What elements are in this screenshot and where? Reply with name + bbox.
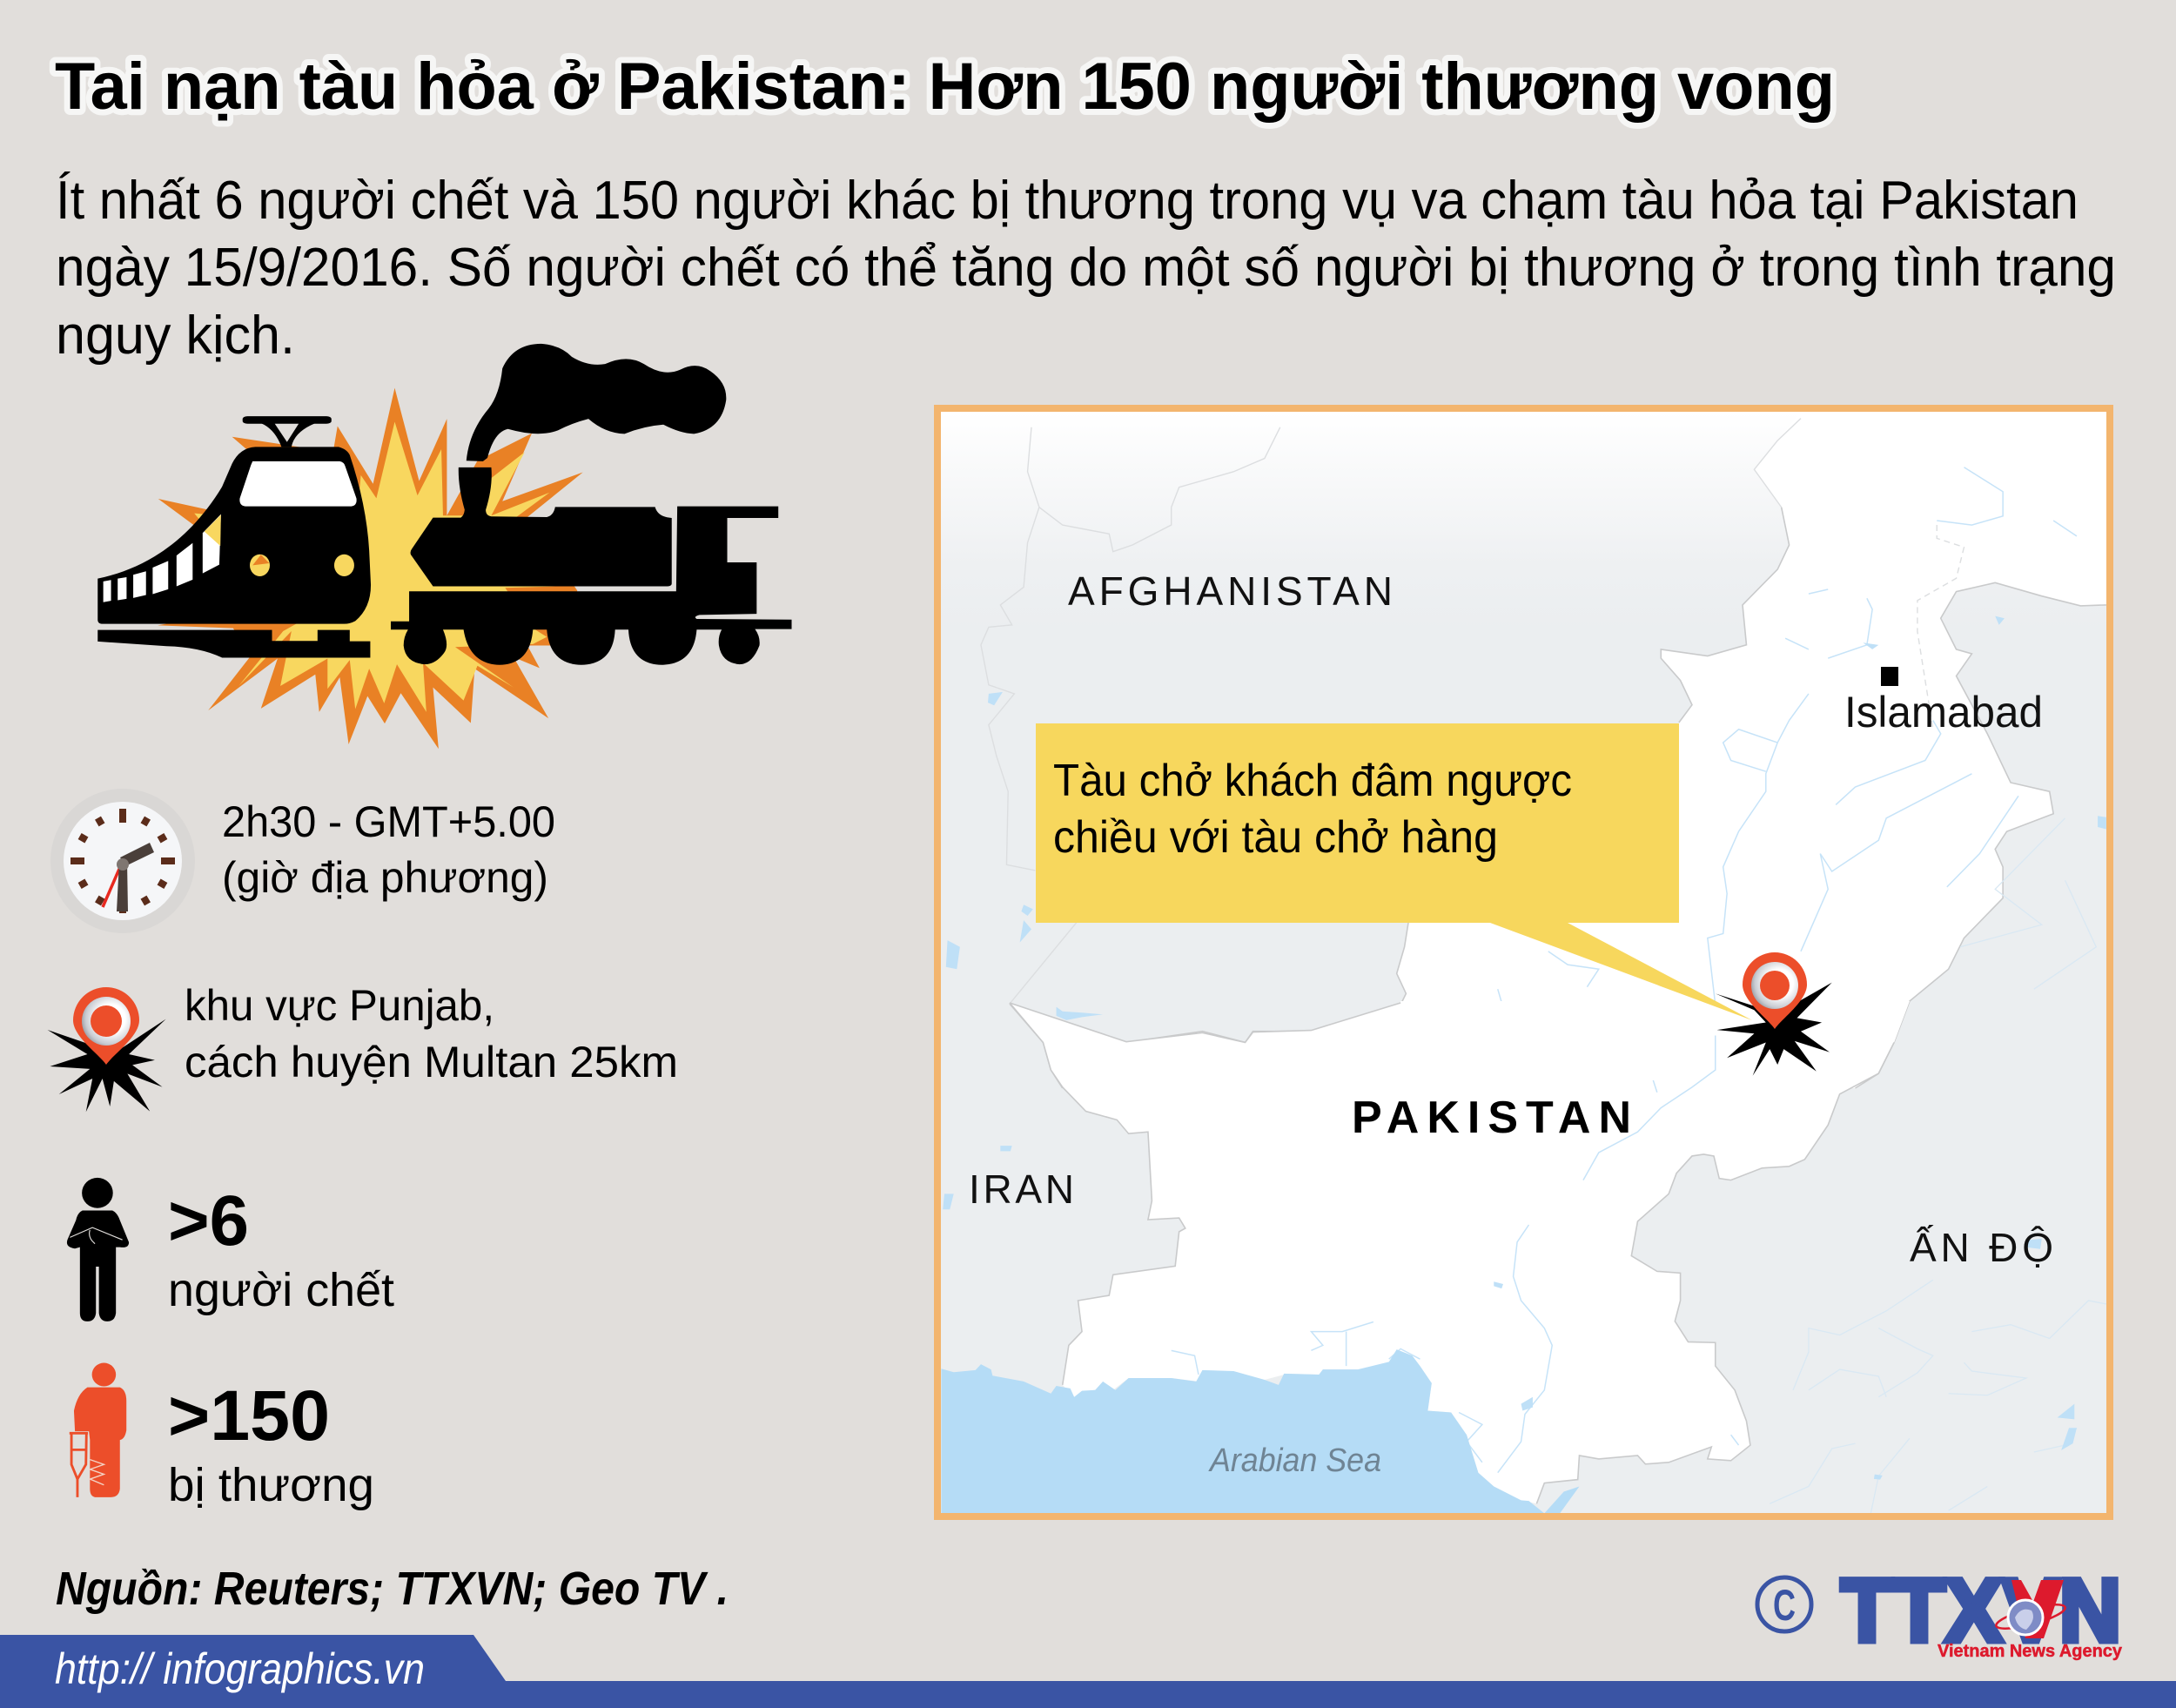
time text: (giờ địa phương) [222, 853, 548, 902]
source: Nguồn: Reuters; TTXVN; Geo TV . [56, 1563, 729, 1615]
time text [222, 797, 555, 902]
footer url: http:// infographics.vn [55, 1644, 425, 1693]
steam locomotive boiler [411, 467, 672, 587]
copyright mark [1757, 1577, 1811, 1631]
headlights [250, 555, 354, 576]
intro text: ngày 15/9/2016. Số người chết có thể tăng do một số người bị thương ở trong tình trạng [56, 238, 2116, 298]
footer bar [0, 1635, 2176, 1708]
callout: chiều với tàu chở hàng [1053, 812, 1498, 863]
callout [1036, 723, 1752, 1020]
illustration: train collision [97, 344, 792, 749]
explosion burst [158, 388, 583, 749]
location text: khu vực Punjab, [185, 981, 494, 1030]
label: Afghanistan: AFGHANISTAN [1068, 568, 1393, 614]
logo: TTXVN: TTXVN [1841, 1561, 2121, 1660]
icon: injured person with crutch [70, 1363, 126, 1497]
label: Islamabad: Islamabad [1844, 688, 2043, 736]
Pakistan northern area [946, 412, 2106, 1088]
deaths figure: người chết [168, 1264, 394, 1316]
intro text [56, 171, 2116, 366]
callout: Tàu chở khách đâm ngược [1053, 756, 1572, 806]
locomotive cab and wheels [391, 507, 792, 665]
Pakistan southern area [943, 1001, 2106, 1513]
location text: cách huyện Multan 25km [185, 1038, 678, 1086]
smoke [467, 344, 726, 461]
icon: location pin with burst [48, 987, 166, 1112]
train undercarriage [97, 630, 370, 657]
label: Pakistan: PAKISTAN [1352, 1093, 1631, 1143]
injured figure: bị thương [168, 1459, 374, 1511]
injured figure: >150 [168, 1376, 330, 1456]
logo: TTXVN: Vietnam News Agency [1938, 1642, 2123, 1661]
injured figure [168, 1376, 374, 1511]
label: Iran: IRAN [969, 1167, 1074, 1212]
icon: clock [50, 789, 195, 933]
copyright mark: C [1773, 1581, 1796, 1630]
deaths figure [168, 1181, 394, 1316]
time text: 2h30 - GMT+5.00 [222, 797, 555, 846]
label: India: ẤN ĐỘ [1910, 1225, 2053, 1270]
pantograph [243, 416, 332, 447]
electric train body [97, 447, 371, 624]
map base [941, 412, 2106, 1513]
train windows [104, 461, 357, 602]
label: Arabian Sea: Arabian Sea [1208, 1442, 1381, 1479]
marker: Islamabad [1881, 667, 1898, 686]
intro text: nguy kịch. [56, 306, 295, 366]
Arabian Sea [942, 1349, 1579, 1513]
panel: map of Pakistan [937, 408, 2110, 1552]
map frame [937, 408, 2110, 1516]
icon: dead person [67, 1178, 129, 1321]
icon: accident pin on map [1716, 952, 1832, 1076]
location text [185, 981, 678, 1086]
intro text: Ít nhất 6 người chết và 150 người khác bị thương trong vụ va chạm tàu hỏa tại Pakistan [56, 171, 2079, 231]
title: Tai nạn tàu hỏa ở Pakistan: Hơn 150 người thương vong [55, 50, 1835, 124]
deaths figure: >6 [168, 1181, 249, 1261]
burst seen through side window [205, 514, 221, 546]
